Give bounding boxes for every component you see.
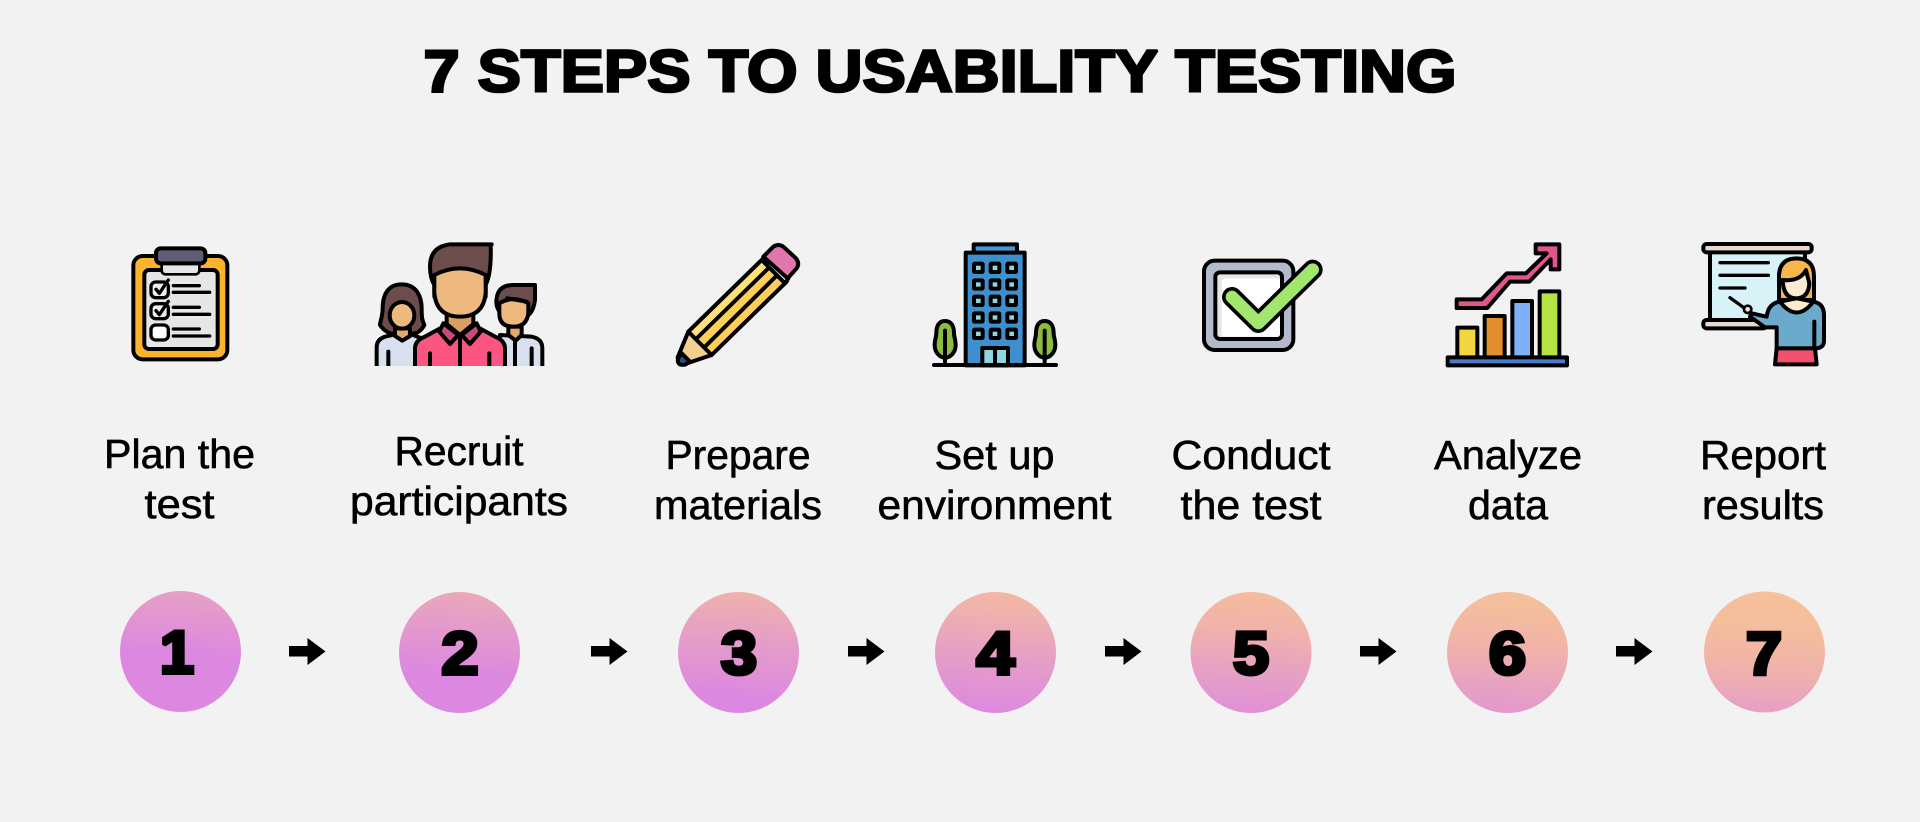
icon: checkmark in box (1204, 261, 1313, 350)
label: plan the test: test (144, 481, 215, 527)
number circle 5: 5 (1233, 620, 1269, 687)
label: set up environment (878, 432, 1112, 528)
label: prepare materials: materials (654, 482, 822, 528)
arrow 6 to 7 (1616, 638, 1652, 665)
label: plan the test: Plan the (104, 431, 255, 477)
number circle 1: 1 (160, 619, 194, 686)
step 2: recruit participants (350, 244, 568, 713)
step 7: report results (1700, 244, 1827, 712)
label: recruit participants: Recruit (394, 428, 524, 474)
number circle 7 (1704, 592, 1825, 712)
label: report results: results (1702, 482, 1824, 528)
title: 7 STEPS TO USABILITY TESTING (424, 38, 1456, 104)
label: conduct the test: Conduct (1172, 432, 1331, 478)
icon: office building with trees (934, 244, 1056, 365)
number circle 2: 2 (442, 620, 478, 687)
label: recruit participants: participants (350, 478, 568, 524)
label: set up environment: environment (878, 482, 1112, 528)
label: recruit participants (350, 428, 568, 524)
label: report results (1700, 432, 1827, 528)
step 6: analyze data (1434, 244, 1582, 713)
label: set up environment: Set up (934, 432, 1054, 478)
label: report results: Report (1700, 432, 1827, 478)
number circle 6 (1447, 592, 1568, 713)
label: analyze data (1434, 432, 1582, 528)
icon: pencil (678, 245, 798, 365)
icon: clipboard checklist (133, 248, 227, 359)
label: conduct the test: the test (1180, 482, 1322, 528)
step 4: set up environment (878, 244, 1112, 713)
label: prepare materials: Prepare (666, 432, 810, 478)
step 1: plan the test (104, 248, 255, 712)
label: analyze data: data (1468, 482, 1548, 528)
arrow 3 to 4 (848, 638, 884, 665)
step 3: prepare materials (654, 245, 822, 713)
arrow 1 to 2 (289, 638, 326, 665)
number circle 3 (678, 592, 799, 713)
number circle 3: 3 (721, 620, 757, 687)
number circle 6: 6 (1489, 620, 1526, 687)
number circle 5 (1190, 592, 1312, 713)
number circle 2 (399, 592, 520, 713)
step 5: conduct the test (1172, 261, 1331, 713)
arrow 5 to 6 (1360, 638, 1396, 665)
arrow 2 to 3 (591, 638, 628, 665)
number circle 4 (935, 592, 1056, 713)
number circle 4: 4 (976, 620, 1015, 687)
label: prepare materials (654, 432, 822, 528)
number circle 1 (120, 591, 241, 712)
number circle 7: 7 (1746, 620, 1782, 687)
label: plan the test (104, 431, 255, 527)
icon: presenter at screen (1703, 244, 1824, 364)
label: conduct the test (1172, 432, 1331, 528)
arrow 4 to 5 (1105, 638, 1142, 665)
icon: team of three people (377, 244, 542, 368)
icon: rising bar chart (1448, 244, 1567, 365)
label: analyze data: Analyze (1434, 432, 1582, 478)
